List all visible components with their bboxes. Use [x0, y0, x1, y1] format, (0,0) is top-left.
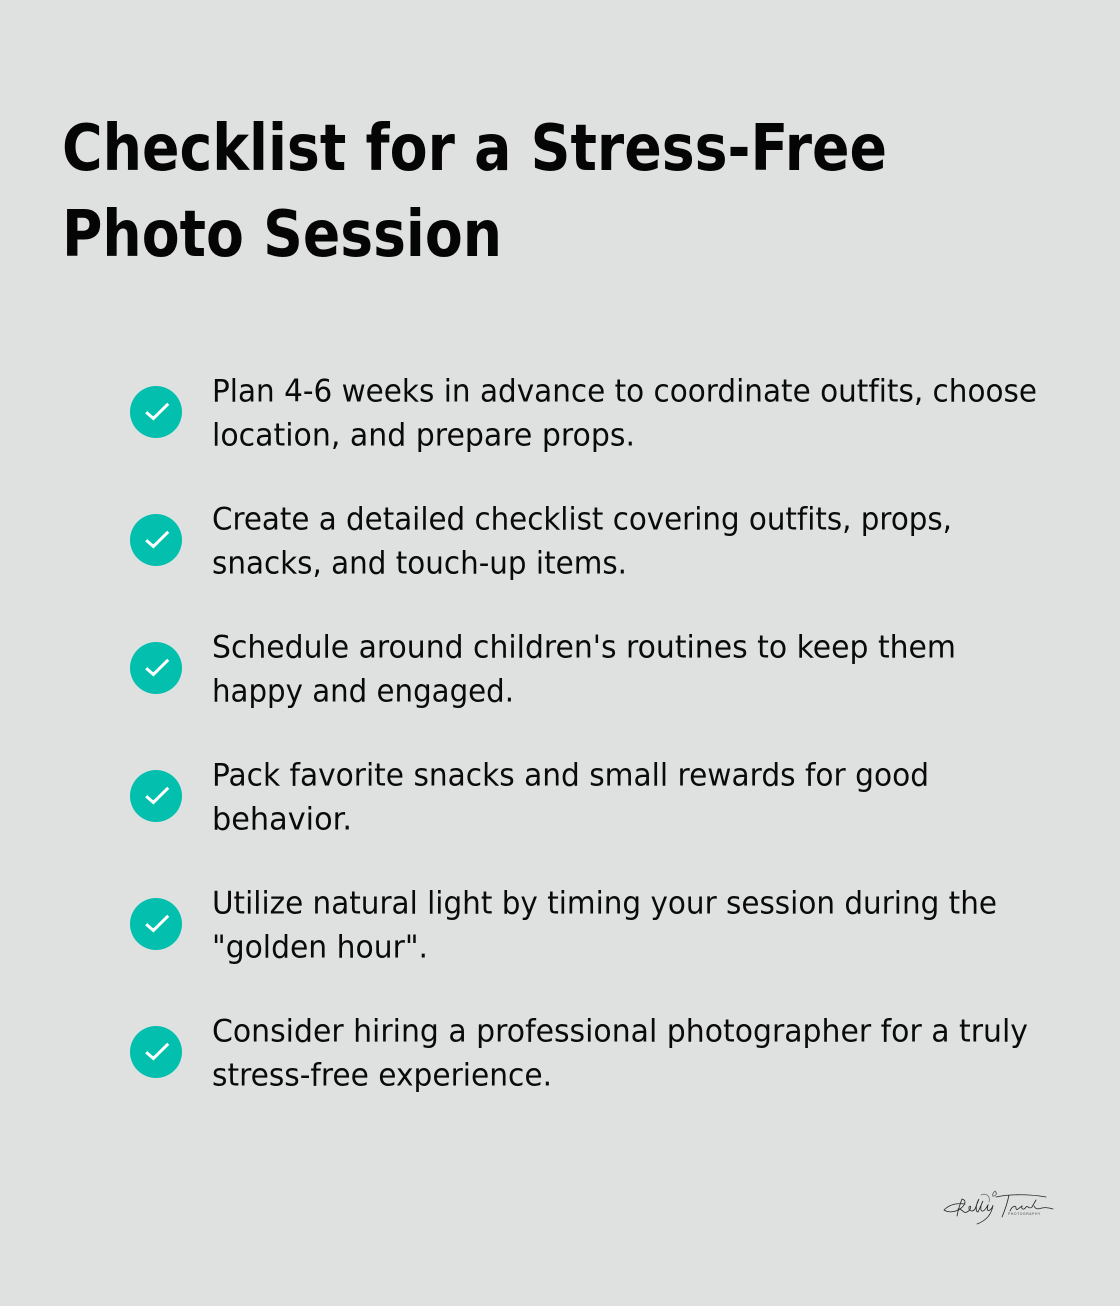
logo: photographer signature: [944, 1191, 1053, 1224]
text 6: stress-free experience.: [212, 1058, 552, 1094]
text 3: happy and engaged.: [212, 674, 514, 710]
item 1: [130, 374, 1037, 454]
text 3: [212, 630, 956, 710]
text 5: Utilize natural light by timing your session during the: [212, 886, 997, 922]
text 1: Plan 4-6 weeks in advance to coordinate outfits, choose: [212, 374, 1037, 410]
text 4: behavior.: [212, 802, 352, 838]
icon: check 3: [130, 642, 182, 694]
logo subtitle: PHOTOGRAPHY: [1008, 1212, 1041, 1216]
title: [62, 112, 887, 272]
text 3: Schedule around children's routines to keep them: [212, 630, 956, 666]
icon: check 5: [130, 898, 182, 950]
text 6: [212, 1014, 1028, 1094]
item 2: [130, 502, 952, 582]
icon: check 1: [130, 386, 182, 438]
icon: check 6: [130, 1026, 182, 1078]
item 4: [130, 758, 929, 838]
title: Photo Session: [62, 198, 502, 272]
text 6: Consider hiring a professional photographer for a truly: [212, 1014, 1028, 1050]
item 5: [130, 886, 997, 966]
text 5: "golden hour".: [212, 930, 428, 966]
icon: check 2: [130, 514, 182, 566]
text 5: [212, 886, 997, 966]
text 4: [212, 758, 929, 838]
icon: check 4: [130, 770, 182, 822]
text 1: location, and prepare props.: [212, 418, 635, 454]
title: Checklist for a Stress-Free: [62, 112, 887, 186]
text 1: [212, 374, 1037, 454]
item 3: [130, 630, 956, 710]
text 2: Create a detailed checklist covering outfits, props,: [212, 502, 952, 538]
text 2: snacks, and touch-up items.: [212, 546, 627, 582]
text 4: Pack favorite snacks and small rewards for good: [212, 758, 929, 794]
text 2: [212, 502, 952, 582]
checklist: [130, 374, 1037, 1094]
item 6: [130, 1014, 1028, 1094]
